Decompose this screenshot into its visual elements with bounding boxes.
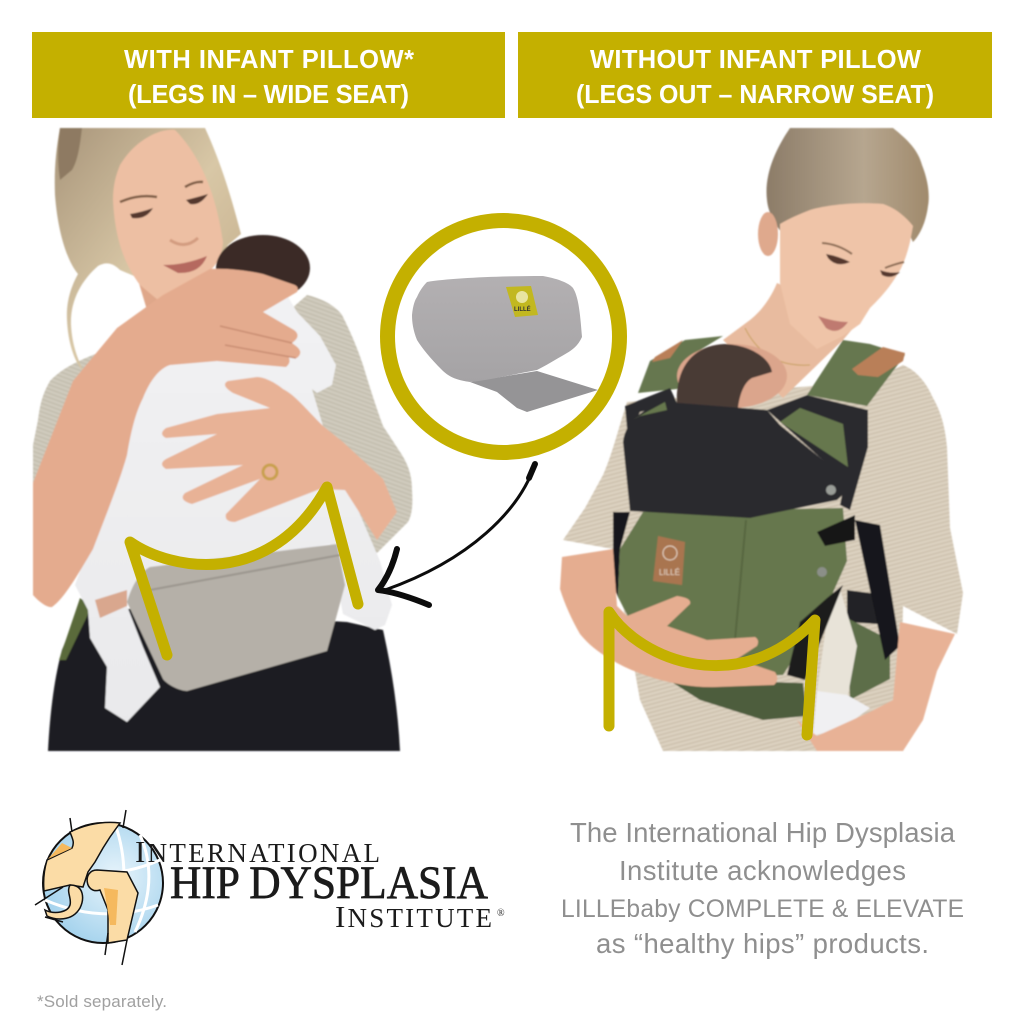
green carrier edge bbox=[59, 598, 92, 660]
pillow label bbox=[506, 286, 538, 317]
header: without infant pillow: (LEGS OUT – NARROW SEAT) bbox=[576, 81, 934, 109]
carrier bottom band bbox=[667, 679, 807, 720]
photo: mother wearing carrier without infant pillow bbox=[560, 128, 963, 751]
yellow seat line: narrow seat bbox=[609, 612, 815, 735]
mother's lower hand bbox=[162, 377, 397, 540]
neck and chest bbox=[723, 283, 860, 398]
femur bone bbox=[87, 870, 138, 943]
dark edge of seat bbox=[787, 585, 843, 680]
eyes bbox=[826, 254, 900, 277]
nose shadow bbox=[170, 238, 198, 245]
acknowledgement text bbox=[561, 817, 964, 959]
infant pillow in use bbox=[127, 544, 345, 691]
baby body and legs bbox=[75, 273, 392, 722]
logo wordmark: HIP DYSPLASIA bbox=[170, 857, 488, 909]
neck bbox=[135, 260, 215, 320]
mother's other hand and forearm bbox=[797, 622, 955, 751]
black headrest bbox=[623, 388, 868, 518]
globe grid lines bbox=[45, 824, 160, 942]
logo wordmark: INSTITUTE bbox=[335, 899, 492, 934]
acknowledgement text: as “healthy hips” products. bbox=[596, 928, 929, 959]
hair bun bbox=[58, 128, 82, 180]
femur orange shading bbox=[104, 888, 118, 925]
bone extension strokes bbox=[35, 810, 127, 965]
circle callout: infant pillow bbox=[388, 220, 620, 452]
lips bbox=[163, 256, 207, 273]
brown carrier label: LILLÉ bbox=[659, 568, 680, 577]
logo: International Hip Dysplasia Institute bbox=[35, 810, 505, 965]
necklace bbox=[745, 328, 810, 365]
eyes bbox=[130, 194, 208, 218]
carrier body bbox=[618, 508, 847, 679]
small green panel bbox=[632, 402, 667, 420]
baby head bbox=[216, 235, 310, 301]
ear bbox=[758, 212, 778, 256]
mother's supporting hand and forearm bbox=[560, 549, 777, 687]
carrier rear panel bbox=[847, 618, 890, 700]
acknowledgement text: LILLEbaby COMPLETE & ELEVATE bbox=[561, 896, 964, 923]
pillow body bbox=[412, 276, 582, 382]
carrier straps bbox=[638, 336, 905, 406]
acknowledgement text: The International Hip Dysplasia bbox=[570, 817, 956, 848]
footnote: *Sold separately. bbox=[37, 992, 167, 1011]
globe bbox=[43, 823, 163, 943]
finger creases bbox=[220, 326, 296, 358]
mother's face bbox=[780, 203, 913, 349]
header: without infant pillow bbox=[518, 32, 992, 118]
acknowledgement text: Institute acknowledges bbox=[619, 855, 906, 886]
pillow label: LILLÉ bbox=[514, 305, 531, 313]
brown carrier label bbox=[653, 536, 685, 585]
eyebrows bbox=[822, 243, 904, 268]
black skirt bbox=[48, 606, 400, 751]
logo wordmark: ® bbox=[497, 908, 505, 919]
rear black panel bbox=[847, 590, 893, 625]
baby sock bbox=[813, 691, 870, 736]
header: with infant pillow bbox=[32, 32, 505, 118]
header: with infant pillow: WITH INFANT PILLOW* bbox=[124, 46, 414, 74]
yellow seat line: wide seat bbox=[130, 487, 358, 655]
grey sweater bbox=[33, 295, 412, 553]
headrest snap bbox=[826, 485, 836, 495]
eyebrows bbox=[120, 182, 203, 202]
side buckle and strap bbox=[817, 515, 900, 660]
mother's face bbox=[113, 130, 223, 300]
mother's arm and upper hand bbox=[33, 269, 300, 607]
wedding ring bbox=[263, 465, 277, 479]
logo wordmark: INTERNATIONAL bbox=[135, 834, 380, 869]
lips bbox=[818, 316, 848, 331]
pillow flap bbox=[470, 371, 598, 412]
carrier snap bbox=[817, 567, 827, 577]
pillow seam bbox=[150, 555, 340, 590]
header: with infant pillow: (LEGS IN – WIDE SEAT) bbox=[128, 81, 409, 109]
baby ankle bbox=[95, 590, 127, 618]
logo wordmark bbox=[135, 834, 505, 934]
baby head bbox=[677, 344, 787, 408]
arrow from callout to pillow bbox=[378, 464, 535, 605]
pelvis bone bbox=[44, 822, 120, 891]
leather patches bbox=[652, 340, 905, 377]
lower pelvis ring bbox=[45, 885, 83, 919]
beige sweater bbox=[563, 365, 963, 751]
pelvic orange wedge bbox=[48, 843, 72, 859]
green panel on headrest bbox=[780, 408, 848, 467]
header: without infant pillow: WITHOUT INFANT PILLOW bbox=[590, 46, 922, 74]
hair bbox=[55, 128, 241, 372]
carrier left side strap bbox=[613, 512, 630, 597]
photo: mother holding baby with infant pillow bbox=[33, 128, 412, 751]
hair bbox=[767, 128, 929, 242]
baby leg bbox=[817, 589, 857, 700]
carrier centre seam bbox=[735, 520, 746, 640]
